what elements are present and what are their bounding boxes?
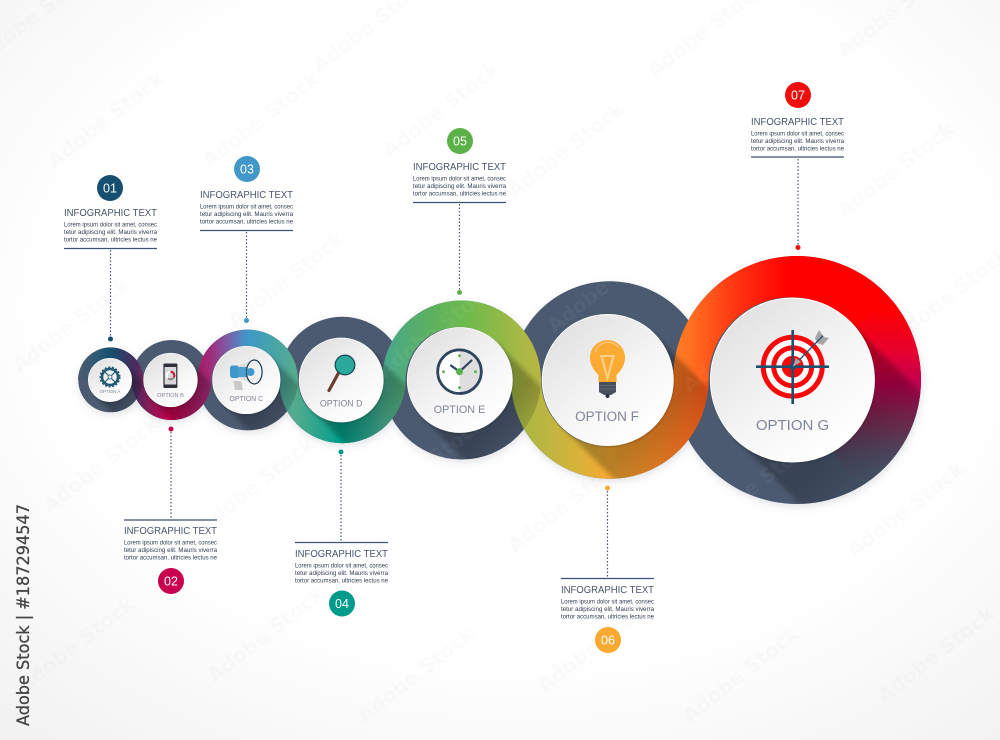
body text 04: tetur adipiscing elit. Mauris viverra [295,570,388,577]
gradient ribbon [78,256,921,479]
body text 01: Lorem ipsum dolor sit amet, consec [64,222,158,228]
heading 07: INFOGRAPHIC TEXT [751,116,845,128]
option D disc [299,338,383,422]
callout 07 [751,82,845,250]
icon: megaphone [230,360,262,390]
number badge 04: 04 [335,597,349,611]
callout 01 [64,175,158,342]
label: option F: OPTION F [575,409,639,424]
callout 04 [295,450,389,616]
icon: magnifying glass [329,355,355,390]
label: option D: OPTION D [320,398,362,408]
body text 07: Lorem ipsum dolor sit amet, consec [751,130,845,138]
callout 05 [413,128,507,295]
icon: target with arrow [756,330,829,404]
number badge 01: 01 [103,182,117,196]
label: option C: OPTION C [229,396,263,403]
option C disc [213,346,280,414]
callout 06 [561,486,655,653]
label: option E: OPTION E [434,404,485,416]
body text 01: tortor accumsan, ultricies lectus ne [64,236,157,244]
body text 03: tortor accumsan, ultricies lectus ne [200,218,293,226]
body text 06: tortor accumsan, ultricies lectus ne [561,614,654,620]
icon: clock [438,350,481,394]
long shadows [96,321,920,504]
option E disc [407,328,512,432]
foreground watermarks: Adobe Stock [363,411,489,517]
body text 02 [124,540,218,562]
callout 02 [124,426,218,594]
label: option G: OPTION G [756,417,829,434]
number badge 01 [97,175,123,201]
body text 07: tetur adipiscing elit. Mauris viverra [751,138,844,145]
heading 02: INFOGRAPHIC TEXT [124,525,218,537]
body text 03: tetur adipiscing elit. Mauris viverra [200,211,293,218]
number badge 05 [447,128,473,154]
body text 07 [751,130,845,152]
body text 04: Lorem ipsum dolor sit amet, consec [295,562,389,570]
body text 02: tetur adipiscing elit. Mauris viverra [124,547,217,554]
number badge 07 [785,82,811,108]
label: option B: OPTION B [157,393,184,399]
heading 01: INFOGRAPHIC TEXT [64,207,158,219]
foreground watermarks: Adobe Stock [373,276,499,382]
body text 06 [561,598,655,620]
icon: gear [100,367,120,387]
body text 04 [295,562,389,584]
body text 05: Lorem ipsum dolor sit amet, consec [413,176,507,182]
body text 03 [200,204,294,226]
foreground watermarks [363,231,819,537]
heading 06: INFOGRAPHIC TEXT [561,584,655,596]
number badge 04 [329,590,355,616]
body text 03: Lorem ipsum dolor sit amet, consec [200,204,294,210]
number badge 02 [158,568,184,594]
number badge 03: 03 [240,162,254,176]
body text 06: Lorem ipsum dolor sit amet, consec [561,598,655,606]
foreground watermarks: Adobe Stock [678,291,804,397]
number badge 02: 02 [164,574,178,588]
number badge 05: 05 [453,134,467,148]
option B disc [144,353,197,407]
option G disc [710,298,874,462]
number badge 06: 06 [601,634,615,648]
callout 03 [200,156,294,323]
number badge 03 [234,156,260,182]
icon: smartphone [163,364,177,388]
body text 01 [64,222,158,244]
body text 02: tortor accumsan, ultricies lectus ne [124,554,217,562]
side credit text: Adobe Stock | #187294547 [14,504,34,726]
icon: light bulb [590,340,625,398]
body text 07: tortor accumsan, ultricies lectus ne [751,146,844,152]
option F disc [542,314,673,446]
heading 03: INFOGRAPHIC TEXT [200,189,294,201]
label: option A: OPTION A [100,389,120,394]
body text 05: tetur adipiscing elit. Mauris viverra [413,183,506,190]
body text 02: Lorem ipsum dolor sit amet, consec [124,540,218,546]
foreground watermarks: Adobe Stock [693,431,819,537]
ribbon end fading into slate [832,300,921,487]
body text 04: tortor accumsan, ultricies lectus ne [295,578,388,584]
body text 06: tetur adipiscing elit. Mauris viverra [561,606,654,613]
slate base rings [78,256,921,504]
heading 04: INFOGRAPHIC TEXT [295,548,389,560]
option A disc [88,358,132,402]
number badge 06 [595,627,621,653]
body text 05: tortor accumsan, ultricies lectus ne [413,190,506,198]
number badge 07: 07 [791,88,805,102]
body text 01: tetur adipiscing elit. Mauris viverra [64,229,157,236]
body text 05 [413,176,507,198]
heading 05: INFOGRAPHIC TEXT [413,161,507,173]
foreground watermarks: Adobe Stock [543,231,669,337]
